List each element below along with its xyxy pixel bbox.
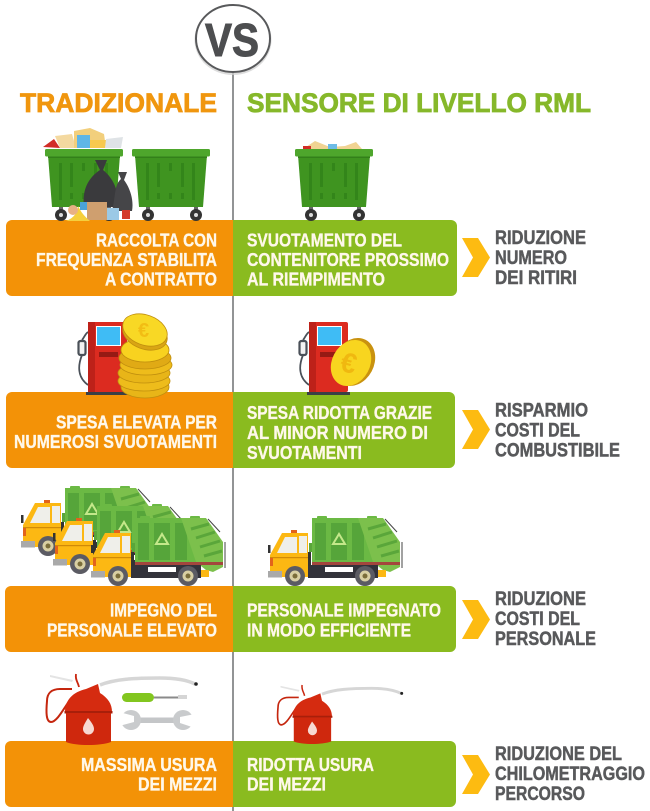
- panel: row 3 sensor: [233, 586, 456, 652]
- panel: row 2 traditional: [6, 392, 233, 468]
- icon: oil can with tools: [46, 674, 198, 745]
- text: benefit 1: DEI RITIRI: [495, 268, 577, 289]
- icon: full bin: [132, 149, 210, 221]
- arrow: row 2: [462, 410, 490, 449]
- text: spesa ridotta: AL MINOR NUMERO DI: [247, 423, 428, 443]
- text: benefit 1: [495, 228, 586, 289]
- heading: tradizionale: TRADIZIONALE: [20, 88, 217, 118]
- panel: row 3 traditional: [5, 586, 233, 652]
- text: spesa elevata: [14, 412, 217, 452]
- text: massima usura: MASSIMA USURA: [81, 755, 217, 775]
- text: benefit 3: PERSONALE: [495, 629, 596, 650]
- text: benefit 3: [495, 589, 596, 650]
- text: raccolta con frequenza stabilita a contratto: [36, 230, 217, 290]
- text: benefit 2: COMBUSTIBILE: [495, 441, 620, 462]
- text: personale impegnato: IN MODO EFFICIENTE: [247, 621, 411, 641]
- text: personale impegnato: PERSONALE IMPEGNATO: [247, 601, 441, 621]
- text: ridotta usura: [247, 755, 374, 795]
- panel: row 4 traditional: [5, 741, 233, 807]
- icon: sensor bin: [295, 141, 373, 221]
- text: benefit 2: COSTI DEL: [495, 421, 580, 442]
- text: raccolta con frequenza stabilita a contratto: RACCOLTA CON: [96, 230, 217, 250]
- text: benefit 2: [495, 401, 620, 462]
- text: spesa ridotta: SVUOTAMENTI: [247, 443, 362, 463]
- text: svuotamento del contenitore: AL RIEMPIMENTO: [247, 270, 385, 290]
- icon: oil can: [278, 685, 403, 744]
- text: raccolta con frequenza stabilita a contratto: FREQUENZA STABILITA: [36, 250, 217, 270]
- text: impegno del personale: IMPEGNO DEL: [110, 601, 217, 621]
- panel: row 1 traditional: [6, 220, 233, 296]
- text: impegno del personale: [47, 601, 217, 641]
- text: benefit 3: RIDUZIONE: [495, 589, 586, 610]
- icon: single garbage truck: [268, 516, 402, 586]
- icon: VS badge: [194, 5, 272, 75]
- icon: VS badge: VS: [205, 14, 259, 66]
- text: svuotamento del contenitore: CONTENITORE PROSSIMO: [247, 250, 449, 270]
- text: ridotta usura: DEI MEZZI: [247, 775, 326, 795]
- text: benefit 4: PERCORSO: [495, 784, 585, 805]
- text: raccolta con frequenza stabilita a contratto: A CONTRATTO: [105, 270, 217, 290]
- text: spesa elevata: SPESA ELEVATA PER: [56, 412, 217, 432]
- text: benefit 4: RIDUZIONE DEL: [495, 744, 622, 765]
- text: benefit 1: RIDUZIONE: [495, 228, 586, 249]
- icon: overflowing bin with bags: [43, 128, 133, 221]
- icon: fuel pump with single coin: [300, 322, 383, 395]
- arrow: row 3: [462, 600, 490, 639]
- panel: row 4 sensor: [233, 741, 456, 807]
- text: massima usura: DEI MEZZI: [138, 775, 217, 795]
- text: benefit 3: COSTI DEL: [495, 609, 580, 630]
- text: spesa ridotta: [247, 403, 432, 463]
- icon: fuel pump with coin stack: €: [138, 320, 149, 342]
- text: spesa ridotta: SPESA RIDOTTA GRAZIE: [247, 403, 432, 423]
- icon: fuel pump with single coin: €: [337, 346, 361, 380]
- arrow: row 4: [462, 755, 490, 794]
- icon: screwdriver: [122, 693, 187, 702]
- text: spesa elevata: NUMEROSI SVUOTAMENTI: [14, 432, 217, 452]
- icon: three garbage trucks: [21, 486, 225, 586]
- text: benefit 2: RISPARMIO: [495, 401, 588, 422]
- text: benefit 1: NUMERO: [495, 248, 567, 269]
- text: personale impegnato: [247, 601, 441, 641]
- icon: wrench: [119, 710, 195, 730]
- panel: row 1 sensor: [233, 220, 457, 296]
- arrow: row 1: [462, 238, 490, 277]
- icon: fuel pump with coin stack: [78, 308, 172, 398]
- text: benefit 4: [495, 744, 645, 805]
- text: massima usura: [81, 755, 217, 795]
- heading: sensore di livello RML: SENSORE DI LIVELLO RML: [247, 88, 591, 118]
- text: impegno del personale: PERSONALE ELEVATO: [47, 621, 217, 641]
- text: svuotamento del contenitore: SVUOTAMENTO DEL: [247, 230, 402, 250]
- panel: row 2 sensor: [233, 392, 455, 468]
- text: ridotta usura: RIDOTTA USURA: [247, 755, 374, 775]
- text: svuotamento del contenitore: [247, 230, 449, 290]
